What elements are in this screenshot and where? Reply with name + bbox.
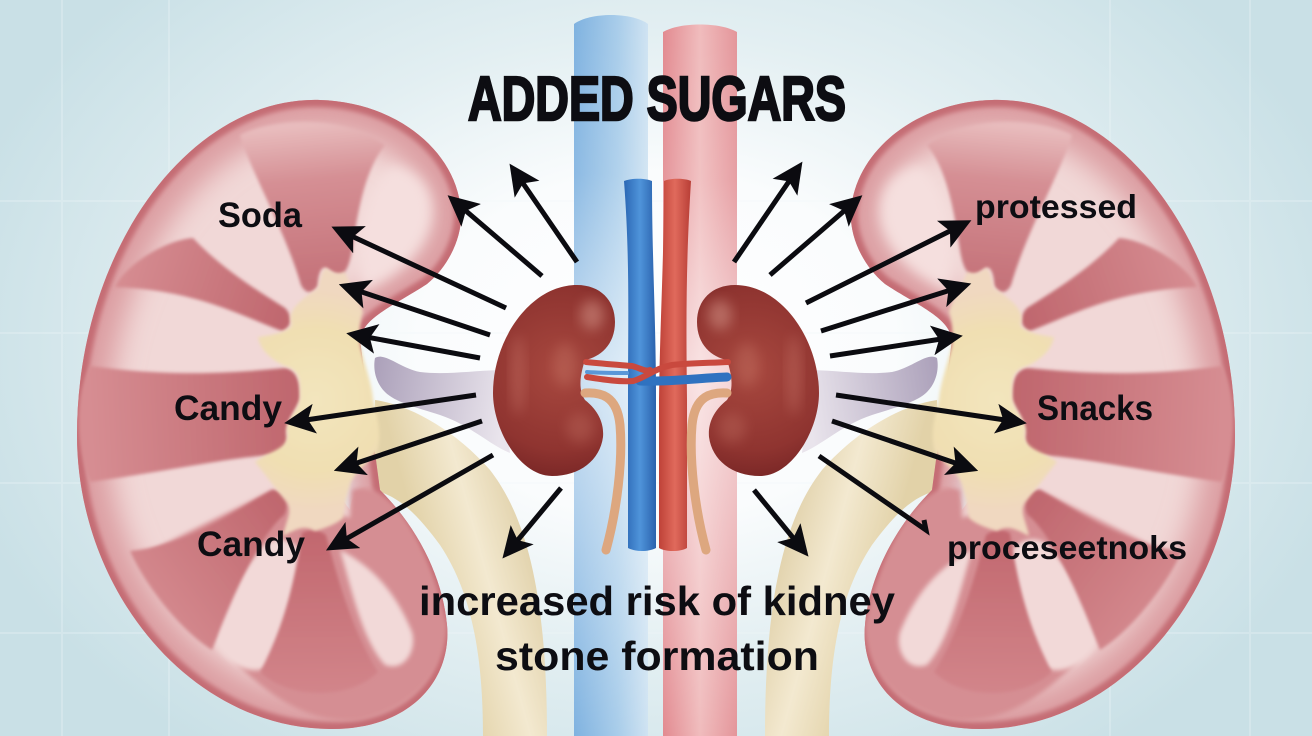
small left kidney [493, 285, 615, 476]
large vertical red vessel [663, 24, 737, 736]
arrow [836, 395, 1012, 421]
arrow [339, 455, 493, 543]
arrow [770, 205, 851, 275]
ureter, large [372, 400, 547, 736]
small right kidney [697, 285, 819, 476]
renal vessels crossing [586, 362, 728, 381]
left small ureter [585, 393, 621, 550]
caption: stone formation [495, 633, 819, 679]
label: proceseetnoks: proceseetnoks [947, 529, 1187, 566]
medulla pyramid: bottom [260, 530, 378, 693]
arrow [832, 421, 964, 466]
right small ureter [691, 393, 727, 550]
arrow [819, 456, 926, 530]
caption: increased risk of kidney [419, 578, 895, 624]
renal vein band [374, 357, 510, 453]
label: Candy upper: Candy [174, 389, 283, 428]
lower pink zone [150, 488, 447, 720]
medulla pyramid: middle [79, 366, 300, 482]
label: Candy lower: Candy [197, 525, 306, 564]
large cross-section kidney, left [77, 100, 547, 736]
title: ADDED SUGARS [468, 65, 846, 134]
large cross-section kidney, right [765, 100, 1235, 736]
arrow [830, 338, 948, 356]
medulla pyramid: upper left [115, 238, 290, 331]
caption [419, 578, 895, 679]
arrows radiating from the kidneys [299, 174, 1012, 547]
arrow [353, 289, 490, 335]
arrow [754, 490, 799, 545]
arrow [806, 227, 958, 303]
kidney body [77, 100, 461, 729]
arrow [734, 174, 794, 262]
label: protessed: protessed [975, 188, 1137, 225]
label: Soda: Soda [218, 196, 303, 235]
arrow [361, 336, 480, 358]
renal pelvis [255, 268, 379, 536]
arrow [459, 205, 542, 276]
central blue vein [624, 179, 656, 551]
medulla pyramid: lower left [130, 490, 287, 650]
arrow [518, 176, 577, 262]
medulla pyramid: top [240, 122, 385, 292]
arrow [348, 421, 482, 466]
arrow [299, 395, 476, 421]
large vertical blue vessel [574, 15, 648, 736]
light fingers [213, 539, 302, 670]
central red artery [659, 179, 691, 551]
arrow [345, 233, 506, 308]
arrow [512, 488, 561, 547]
upper right light lobe [358, 166, 431, 290]
label: Snacks: Snacks [1037, 389, 1153, 428]
arrow [821, 288, 957, 331]
